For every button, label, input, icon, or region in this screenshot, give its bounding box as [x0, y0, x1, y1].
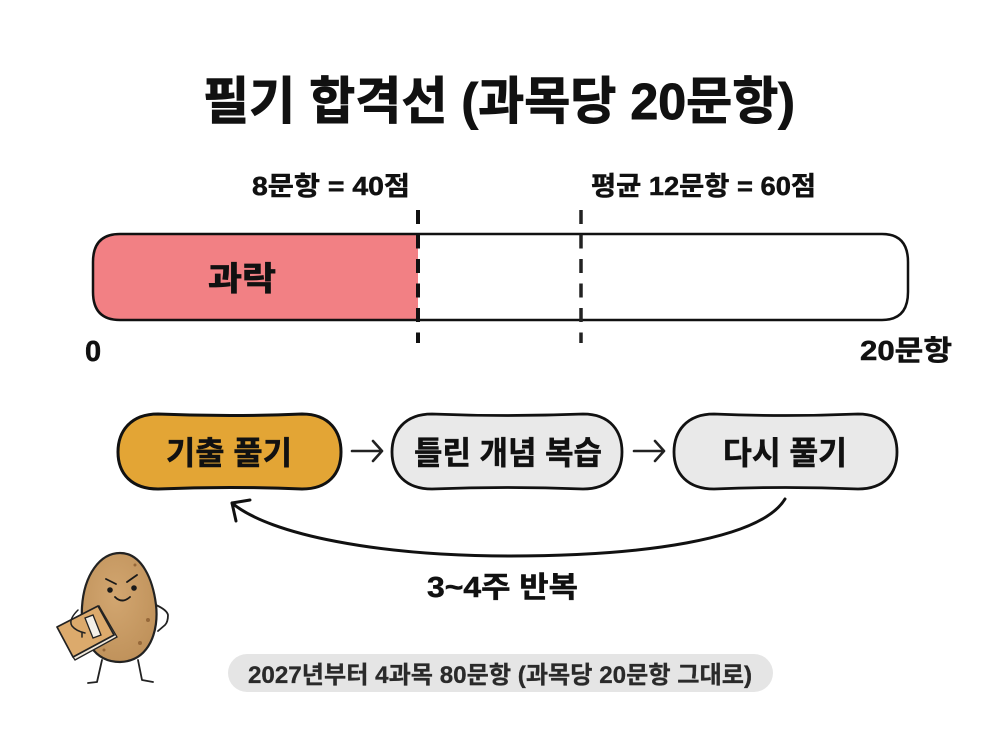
bar label: fail: 과락 [208, 260, 276, 297]
arrow: step 2 to step 3 [634, 441, 664, 461]
potato legs and arm [88, 605, 168, 683]
icon: potato mascot with book [57, 553, 168, 683]
marker: 8 questions dashed line [416, 210, 420, 343]
marker: 12 questions dashed line [579, 210, 583, 343]
arrow: step 1 to step 2 [352, 441, 382, 461]
step: review wrong concepts [392, 414, 622, 489]
step: review wrong concepts: 틀린 개념 복습 [414, 435, 602, 471]
hand on book [71, 610, 85, 637]
book [73, 606, 117, 660]
step: solve again: 다시 풀기 [723, 435, 847, 471]
label: repeat for 3 to 4 weeks: 3~4주 반복 [427, 571, 578, 604]
book label [85, 615, 101, 638]
label: 8 questions = 40 points: 8문항 = 40점 [252, 171, 410, 201]
progress bar [93, 210, 908, 343]
potato body [82, 553, 157, 662]
step: solve past exams: 기출 풀기 [166, 435, 292, 471]
arrow: loop back to step 1 [232, 499, 785, 556]
potato spots [102, 564, 150, 652]
title: 필기 합격선 (과목당 20문항) [203, 73, 795, 130]
footer note: 2027년부터 4과목 80문항 (과목당 20문항 그대로) [248, 662, 752, 689]
axis label: 20 questions: 20문항 [860, 335, 952, 366]
label: average 12 questions = 60 points: 평균 12문항 = 60점 [591, 171, 816, 201]
bar: red fill segment [93, 234, 418, 320]
axis label: zero: 0 [85, 336, 101, 368]
step: solve past exams [118, 414, 341, 489]
bar: outline [93, 234, 908, 320]
footer note [228, 654, 773, 692]
potato face [106, 575, 137, 600]
step: solve again [674, 414, 897, 489]
